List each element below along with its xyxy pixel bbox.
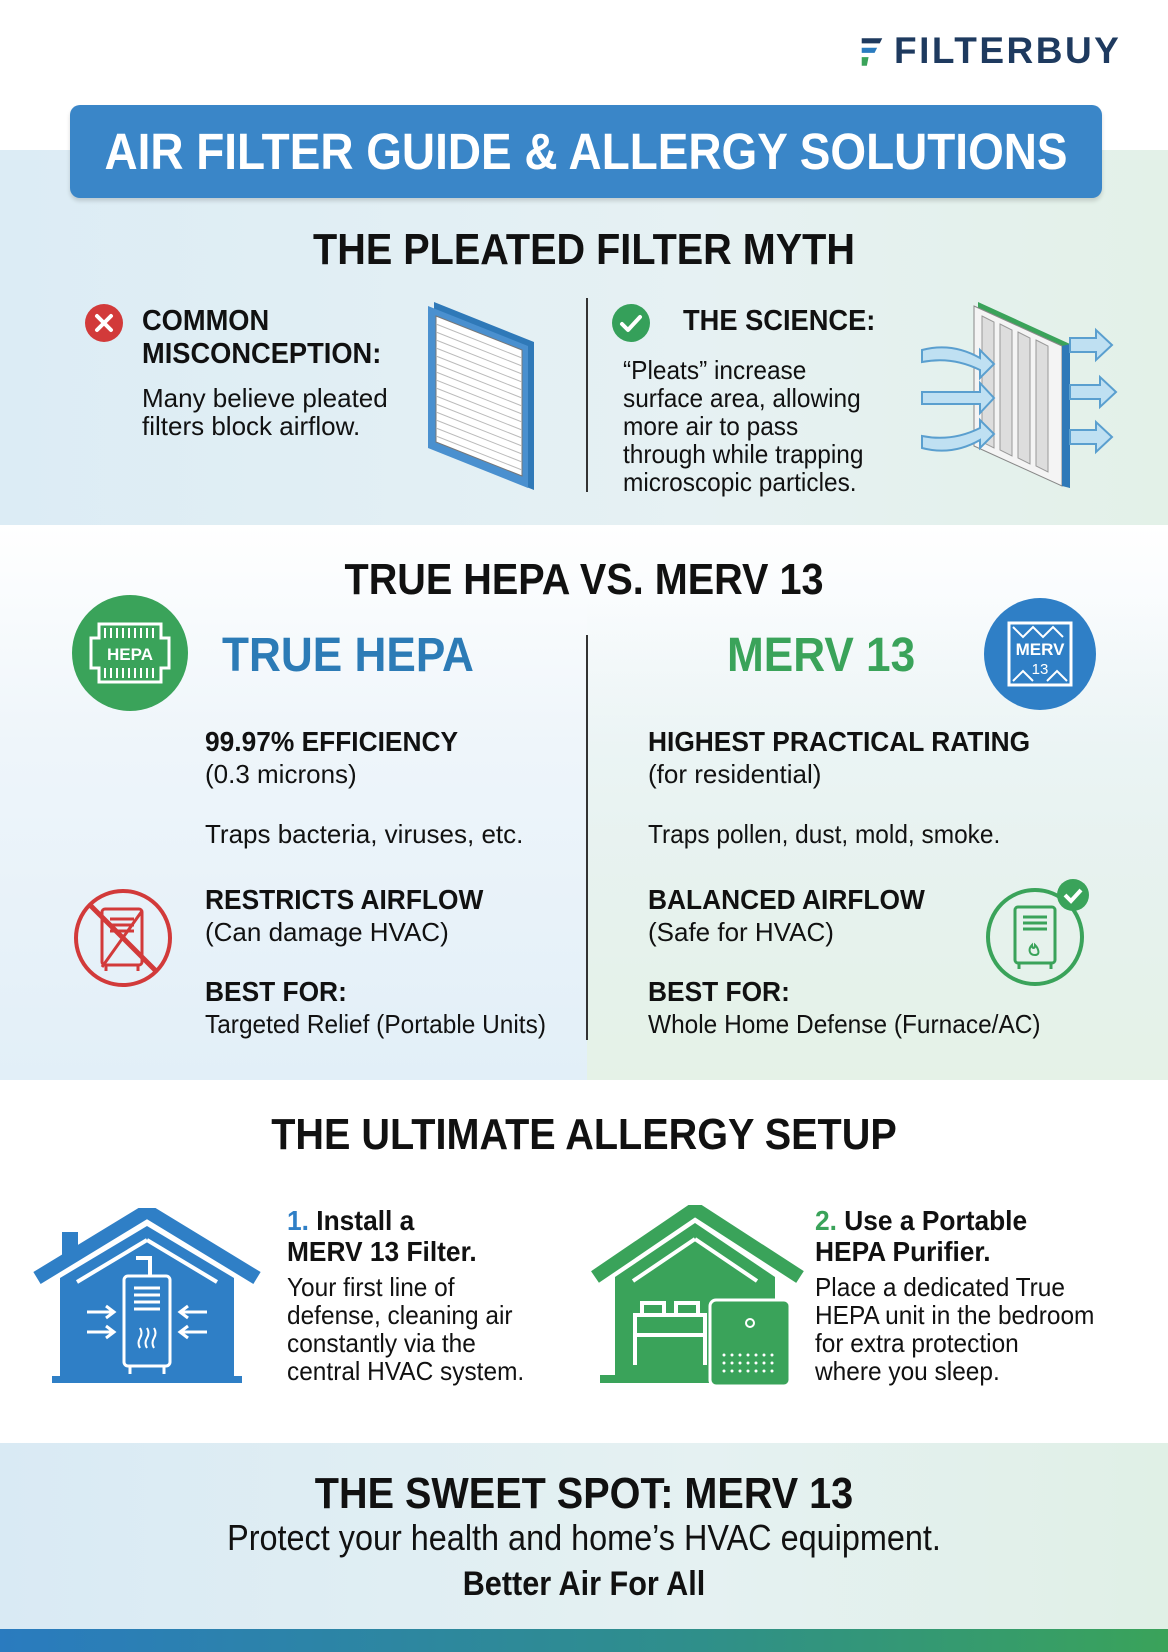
panel: the science: more air to pass	[623, 411, 798, 441]
panel: merv details: (Safe for HVAC)	[648, 917, 834, 947]
text: tagline: Protect your health and home’s HVAC equipment.	[227, 1517, 941, 1558]
icon: MERV badge	[984, 598, 1096, 710]
text: step 2: 2. Use a Portable	[815, 1205, 1027, 1236]
title banner: AIR FILTER GUIDE & ALLERGY SOLUTIONS	[104, 123, 1068, 180]
background: section 4	[0, 1443, 1168, 1630]
panel: hepa details: Targeted Relief (Portable Units)	[205, 1009, 546, 1039]
panel: misconception: MISCONCEPTION:	[142, 338, 381, 370]
icon: red x	[85, 304, 123, 342]
panel: the science: through while trapping	[623, 439, 863, 469]
icon: MERV badge: MERV	[1016, 640, 1065, 659]
panel: the science	[612, 302, 1118, 497]
panel: the science: “Pleats” increase	[623, 355, 806, 385]
panel: hepa details: Traps bacteria, viruses, etc.	[205, 819, 523, 849]
background: section 2	[0, 525, 1168, 1080]
panel: hepa details	[205, 726, 546, 1039]
panel: merv details: BALANCED AIRFLOW	[648, 884, 925, 915]
panel: merv details: Whole Home Defense (Furnace/AC)	[648, 1009, 1041, 1039]
text: step 1: Your first line of	[287, 1272, 455, 1302]
title banner	[70, 105, 1102, 198]
bottom strip	[0, 1629, 1168, 1652]
text: step 2: HEPA Purifier.	[815, 1236, 991, 1267]
heading: true hepa: TRUE HEPA	[222, 629, 474, 682]
text: step 2: Place a dedicated True	[815, 1272, 1065, 1302]
heading: merv 13: MERV 13	[727, 629, 915, 682]
panel: hepa details: RESTRICTS AIRFLOW	[205, 884, 483, 915]
panel: misconception	[85, 302, 534, 490]
text: step 1: defense, cleaning air	[287, 1300, 513, 1330]
panel: merv details: HIGHEST PRACTICAL RATING	[648, 726, 1030, 757]
logo: FILTERBUY	[894, 30, 1121, 71]
icon: pleated filter with arrows	[921, 302, 1118, 488]
panel: merv details	[648, 726, 1041, 1039]
background: section 1	[0, 150, 1168, 525]
icon: green house bedroom	[591, 1205, 804, 1384]
panel: the science: THE SCIENCE:	[683, 305, 875, 337]
heading: pleated filter myth: THE PLEATED FILTER MYTH	[313, 225, 855, 274]
icon: safe furnace	[986, 879, 1089, 986]
icon: flat filter	[428, 302, 534, 490]
text: step 1: central HVAC system.	[287, 1356, 524, 1386]
divider	[586, 635, 588, 1040]
text: step 2: for extra protection	[815, 1328, 1019, 1358]
icon: restricted furnace	[74, 889, 172, 987]
heading: sweet spot: THE SWEET SPOT: MERV 13	[315, 1469, 853, 1518]
divider	[586, 298, 588, 492]
panel: hepa details: 99.97% EFFICIENCY	[205, 726, 458, 757]
text: step 1: 1. Install a	[287, 1205, 414, 1236]
panel: hepa details: (Can damage HVAC)	[205, 917, 449, 947]
text: step 1	[287, 1205, 524, 1386]
panel: misconception: COMMON	[142, 305, 269, 337]
text: step 1: constantly via the	[287, 1328, 476, 1358]
panel: merv details: BEST FOR:	[648, 976, 790, 1007]
icon: green check	[612, 304, 650, 342]
panel: misconception: filters block airflow.	[142, 411, 360, 441]
text: step 2: where you sleep.	[815, 1356, 1000, 1386]
heading: ultimate allergy setup: THE ULTIMATE ALLERGY SETUP	[271, 1110, 897, 1159]
panel: hepa details: BEST FOR:	[205, 976, 347, 1007]
text: step 2: HEPA unit in the bedroom	[815, 1300, 1094, 1330]
text: step 1: MERV 13 Filter.	[287, 1236, 477, 1267]
text: step 2	[815, 1205, 1094, 1386]
panel: hepa details: (0.3 microns)	[205, 759, 357, 789]
icon: blue house furnace	[33, 1208, 261, 1383]
panel: merv details: (for residential)	[648, 759, 821, 789]
icon: HEPA badge	[72, 595, 188, 711]
icon: MERV badge: 13	[1032, 661, 1048, 678]
panel: the science: surface area, allowing	[623, 383, 861, 413]
heading: hepa vs merv: TRUE HEPA VS. MERV 13	[345, 555, 823, 604]
panel: misconception: Many believe pleated	[142, 383, 388, 413]
text: slogan: Better Air For All	[463, 1565, 705, 1603]
icon: HEPA badge: HEPA	[107, 645, 153, 664]
panel: merv details: Traps pollen, dust, mold, smoke.	[648, 819, 1000, 849]
panel: the science: microscopic particles.	[623, 467, 857, 497]
